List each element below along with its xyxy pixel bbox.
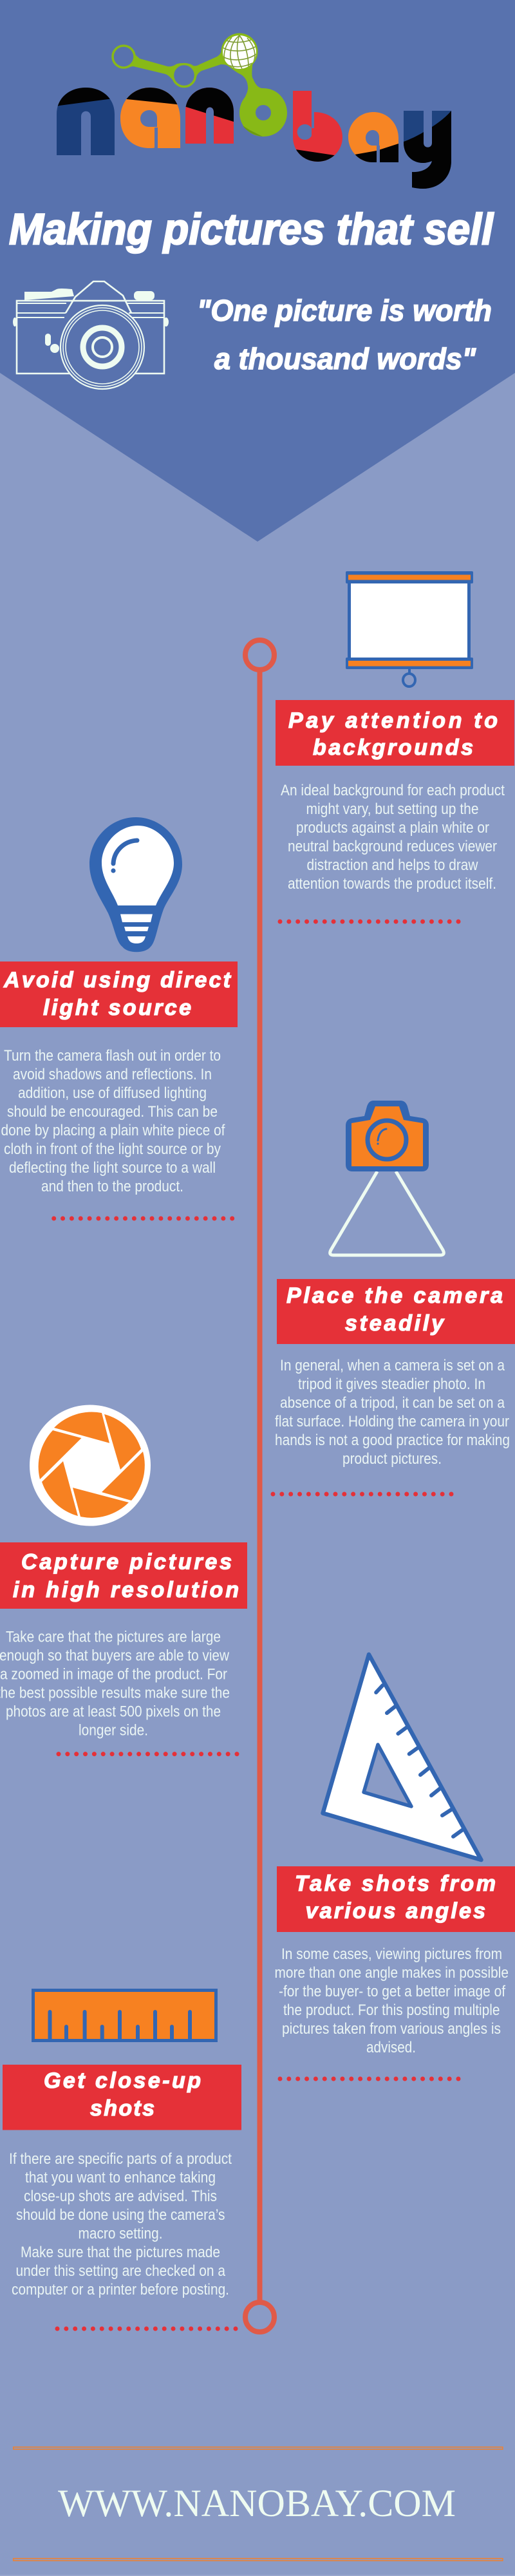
body text [0, 1628, 230, 1739]
logo globe [221, 33, 258, 70]
dotted divider [54, 1216, 233, 1221]
quote: "One picture is worth [197, 294, 492, 327]
heading: backgrounds [313, 735, 473, 760]
logo letter y [404, 111, 451, 189]
dotted divider [280, 920, 460, 923]
heading [3, 2065, 241, 2130]
logo letter b [293, 91, 342, 162]
body text: distraction and helps to draw [306, 857, 478, 874]
logo letter a [120, 88, 180, 148]
body text: Take care that the pictures are large [6, 1628, 221, 1646]
heading: steadily [345, 1311, 445, 1336]
body text: products against a plain white or [296, 819, 489, 837]
body text: close-up shots are advised. This [24, 2188, 217, 2205]
icon: light bulb [89, 817, 182, 952]
panel: steady camera [273, 1101, 515, 1494]
dotted divider [280, 2076, 460, 2081]
body text: done by placing a plain white piece of [1, 1122, 225, 1139]
heading [0, 961, 238, 1027]
body text: macro setting. [79, 2225, 162, 2242]
icon: set square [323, 1654, 482, 1860]
body text: Turn the camera flash out in order to [4, 1047, 221, 1065]
logo ring middle [173, 64, 196, 86]
footer url: WWW.NANOBAY.COM [58, 2482, 456, 2524]
heading [276, 700, 514, 766]
body text [281, 782, 505, 893]
logo ring left [113, 46, 135, 68]
body text: addition, use of diffused lighting [18, 1084, 207, 1102]
heading: shots [90, 2096, 154, 2121]
timeline end circle [245, 2302, 274, 2332]
panel: backgrounds [276, 571, 514, 922]
quote: a thousand words" [214, 342, 476, 375]
icon: projection screen [346, 571, 473, 687]
footer [14, 2447, 503, 2561]
body text: and then to the product. [41, 1178, 183, 1195]
dotted divider [57, 2326, 237, 2331]
logo letter n second [185, 88, 234, 144]
body text: should be encouraged. This can be [7, 1103, 218, 1121]
body text: Make sure that the pictures made [21, 2244, 220, 2261]
heading: Pay attention to [288, 708, 498, 733]
quote [197, 294, 492, 375]
heading: Place the camera [286, 1283, 503, 1308]
body text: avoid shadows and reflections. In [13, 1066, 212, 1083]
body text [275, 1357, 510, 1468]
logo letter a second [348, 112, 398, 162]
body text: product pictures. [342, 1450, 442, 1468]
body text [9, 2150, 232, 2298]
icon: aperture [30, 1405, 151, 1526]
icon: camera on tripod [330, 1101, 444, 1255]
heading: Get close-up [44, 2069, 201, 2093]
panel: direct light [0, 817, 238, 1218]
timeline [245, 640, 274, 2332]
heading: Capture pictures [21, 1549, 232, 1574]
heading: various angles [305, 1899, 485, 1923]
heading [0, 1542, 247, 1609]
body text: that you want to enhance taking [25, 2169, 216, 2186]
body text: longer side. [79, 1722, 148, 1739]
heading: Take shots from [295, 1871, 496, 1896]
body text: might vary, but setting up the [306, 800, 479, 818]
timeline start circle [245, 640, 274, 670]
body text [274, 1946, 509, 2056]
header banner [0, 0, 515, 542]
body text: the best possible results make sure the [0, 1685, 230, 1701]
body text [1, 1047, 225, 1195]
panel: various angles [274, 1654, 515, 2079]
panel: high resolution [0, 1405, 247, 1754]
title: Making pictures that sell [9, 205, 494, 254]
body text: enough so that buyers are able to view [0, 1647, 230, 1664]
dotted divider [273, 1492, 453, 1497]
footer rule [14, 2559, 503, 2561]
bottom edge strip [0, 2575, 515, 2576]
logo: nanobay [57, 33, 451, 189]
body text: deflecting the light source to a wall [9, 1159, 216, 1177]
logo letter n [57, 88, 115, 155]
body text: If there are specific parts of a product [9, 2150, 232, 2168]
body text: should be done using the camera’s [16, 2206, 225, 2224]
heading [277, 1279, 515, 1344]
body text: a zoomed in image of the product. For [0, 1665, 227, 1683]
heading: in high resolution [13, 1578, 239, 1602]
icon: ruler [33, 1990, 216, 2041]
body text: cloth in front of the light source or by [4, 1141, 221, 1158]
panel: close-up shots [3, 1990, 241, 2329]
heading [277, 1866, 515, 1932]
body text: advised. [366, 2039, 416, 2056]
body text: photos are at least 500 pixels on the [6, 1703, 221, 1721]
heading: Avoid using direct [3, 968, 232, 992]
logo letter o [239, 88, 287, 137]
icon: header camera [13, 281, 169, 389]
heading: light source [43, 996, 191, 1020]
body text: under this setting are checked on a [15, 2262, 226, 2280]
body text: tripod it gives steadier photo. In [298, 1376, 485, 1393]
body text: computer or a printer before posting. [12, 2281, 229, 2298]
dotted divider [59, 1752, 238, 1756]
